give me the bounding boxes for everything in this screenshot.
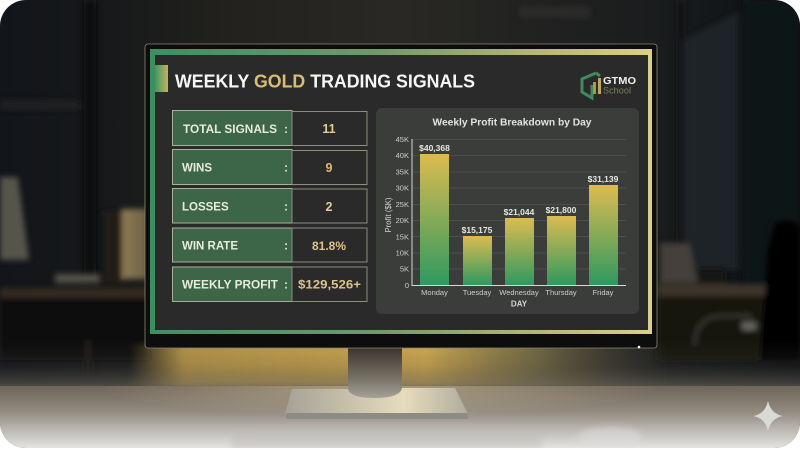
logo subtext: School: [603, 86, 631, 96]
logo wordmark: GTMO: [603, 75, 636, 87]
monitor: [145, 44, 657, 348]
y axis labels: 20K: [396, 216, 409, 225]
bar: Monday: [419, 143, 450, 285]
row: win rate: WIN RATE: [182, 240, 238, 252]
bar: Friday: $31,139: [588, 174, 619, 184]
title: WEEKLY GOLD TRADING SIGNALS: [175, 70, 475, 92]
row: weekly profit: WEEKLY PROFIT: [182, 280, 278, 292]
y axis labels: 5K: [400, 264, 409, 274]
x axis labels: Tuesday: [463, 288, 491, 297]
row: losses: LOSSES: [182, 202, 229, 214]
row: losses: [172, 188, 367, 223]
logo icon: [582, 73, 601, 98]
logo: [582, 73, 636, 98]
right desk, laptop and chair: [657, 221, 800, 360]
panel: profit chart: [376, 108, 639, 314]
x axis labels: Thursday: [545, 288, 577, 297]
y axis labels: [396, 135, 409, 290]
y axis labels: 40K: [396, 151, 409, 160]
axes: [412, 139, 626, 286]
row: wins: :: [284, 162, 288, 174]
row: wins: 9: [326, 161, 333, 175]
title accent block: [155, 65, 168, 92]
left desk: [0, 274, 150, 375]
row: weekly profit: [172, 267, 367, 302]
centre-left lamp: [104, 209, 148, 283]
stat table: [172, 110, 367, 302]
x axis title: DAY: [511, 300, 528, 308]
row: weekly profit: :: [284, 280, 288, 292]
row: total signals: TOTAL SIGNALS: [183, 124, 277, 136]
y axis title: Profit ($K): [384, 197, 393, 232]
bar: Thursday: $21,800: [546, 205, 577, 215]
row: wins: [172, 150, 367, 184]
screen: [155, 55, 648, 330]
row: wins: WINS: [182, 162, 212, 174]
screen frame: [150, 49, 652, 334]
window mullions and wall panels: [0, 0, 800, 290]
row: losses: :: [284, 202, 288, 214]
left lamp: [0, 177, 29, 260]
row: total signals: [172, 110, 367, 146]
bar: Friday: [588, 174, 619, 285]
row: total signals: 11: [322, 122, 336, 136]
bar: Monday: $40,368: [419, 143, 450, 153]
stand base: [285, 388, 468, 414]
row: weekly profit: $129,526+: [298, 278, 361, 292]
fade to dark above the desk: [0, 348, 800, 386]
y axis labels: 10K: [396, 248, 409, 258]
row: win rate: 81.8%: [312, 239, 346, 253]
monitor stand: [285, 346, 468, 419]
bar: Wednesday: $21,044: [504, 207, 535, 217]
desk surface: [0, 386, 800, 450]
power indicator: [638, 346, 640, 348]
x axis labels: Wednesday: [499, 288, 539, 297]
bar: Wednesday: [504, 207, 535, 285]
monitor glow: [130, 344, 670, 388]
row: win rate: :: [284, 240, 288, 252]
bar: Thursday: [546, 205, 577, 285]
row: total signals: :: [284, 124, 288, 136]
icon: sparkle watermark: [753, 401, 783, 431]
bar: Tuesday: $15,175: [462, 225, 493, 235]
y axis labels: 35K: [396, 168, 409, 176]
y axis labels: 45K: [396, 135, 409, 144]
y axis labels: 0: [405, 281, 409, 290]
bar: Tuesday: [462, 225, 493, 285]
chart title: Weekly Profit Breakdown by Day: [432, 116, 592, 128]
x axis labels: Friday: [593, 288, 614, 297]
row: losses: 2: [326, 200, 333, 214]
row: win rate: [172, 228, 367, 262]
x axis labels: Monday: [421, 288, 448, 297]
y axis labels: 30K: [396, 184, 409, 192]
x axis labels: [421, 288, 614, 297]
y axis labels: 15K: [396, 232, 409, 242]
y axis labels: 25K: [396, 200, 409, 209]
